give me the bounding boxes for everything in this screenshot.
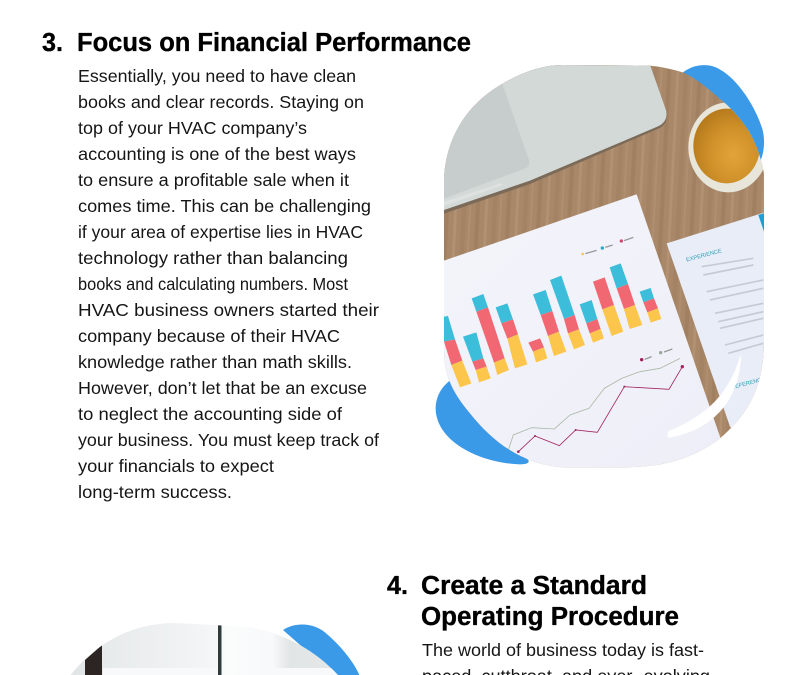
document: resume sheet [667,212,767,470]
heading: section 4: Create a Standard [421,572,647,600]
text block: section 3 body: knowledge rather than math skills. [78,352,352,372]
text block: section 3 body [78,66,379,502]
line chart [508,358,684,453]
text block: section 3 body: books and clear records. Staying on [78,92,364,112]
icon: blue blob bottom left [436,379,529,464]
text block: section 3 body: comes time. This can be challenging [78,196,371,216]
chart legend [581,237,672,361]
window frame thin line [218,623,222,675]
text block: section 3 body: long-term success. [78,482,232,502]
heading: section 3: 3. [42,29,63,57]
icon: blue blob behind lower photo [283,625,362,675]
photo content clipped to rounded shape [433,60,768,470]
document: chart sheet [440,194,730,470]
coffee cup [688,102,768,192]
photo: desk with financial charts and coffee [433,60,768,470]
text block: section 3 body: your financials to expect [78,456,274,476]
window frame dark [85,645,102,675]
text block: section 3 body: Essentially, you need to have clean [78,66,356,86]
heading: section 4 [387,572,679,631]
text block: section 3 body: to neglect the accounting side of [78,404,342,424]
text block: section 3 body: HVAC business owners started their [78,300,379,320]
text block: section 3 body: top of your HVAC company’s [78,118,307,138]
heading: section 3: Focus on Financial Performance [77,29,471,57]
text block: section 3 body: accounting is one of the best ways [78,144,356,164]
text block: section 3 body: your business. You must keep track of [78,430,379,450]
document: resume sheet: REFERENCE [731,376,766,391]
heading: section 4: Operating Procedure [421,603,679,631]
text block: section 3 body: to ensure a profitable sale when it [78,170,349,190]
text block: section 4 body: The world of business today is fast- [422,640,704,660]
document: resume sheet: EXPERIENCE [686,248,723,264]
heading: section 4: 4. [387,572,408,600]
text block: section 3 body: books and calculating numbers. Most [78,274,348,294]
bar chart: stacked bars [433,263,661,387]
text block: section 3 body: company because of their HVAC [78,326,340,346]
laptop [440,60,667,215]
icon: blue blob top right [682,65,764,162]
photo: office window [70,623,338,675]
text block: section 3 body: However, don’t let that be an excuse [78,378,367,398]
text block: section 3 body: technology rather than balancing [78,248,348,268]
text block: section 4 body [422,640,710,675]
text block: section 3 body: if your area of expertise lies in HVAC [78,222,363,242]
icon: white swoosh [668,356,741,437]
